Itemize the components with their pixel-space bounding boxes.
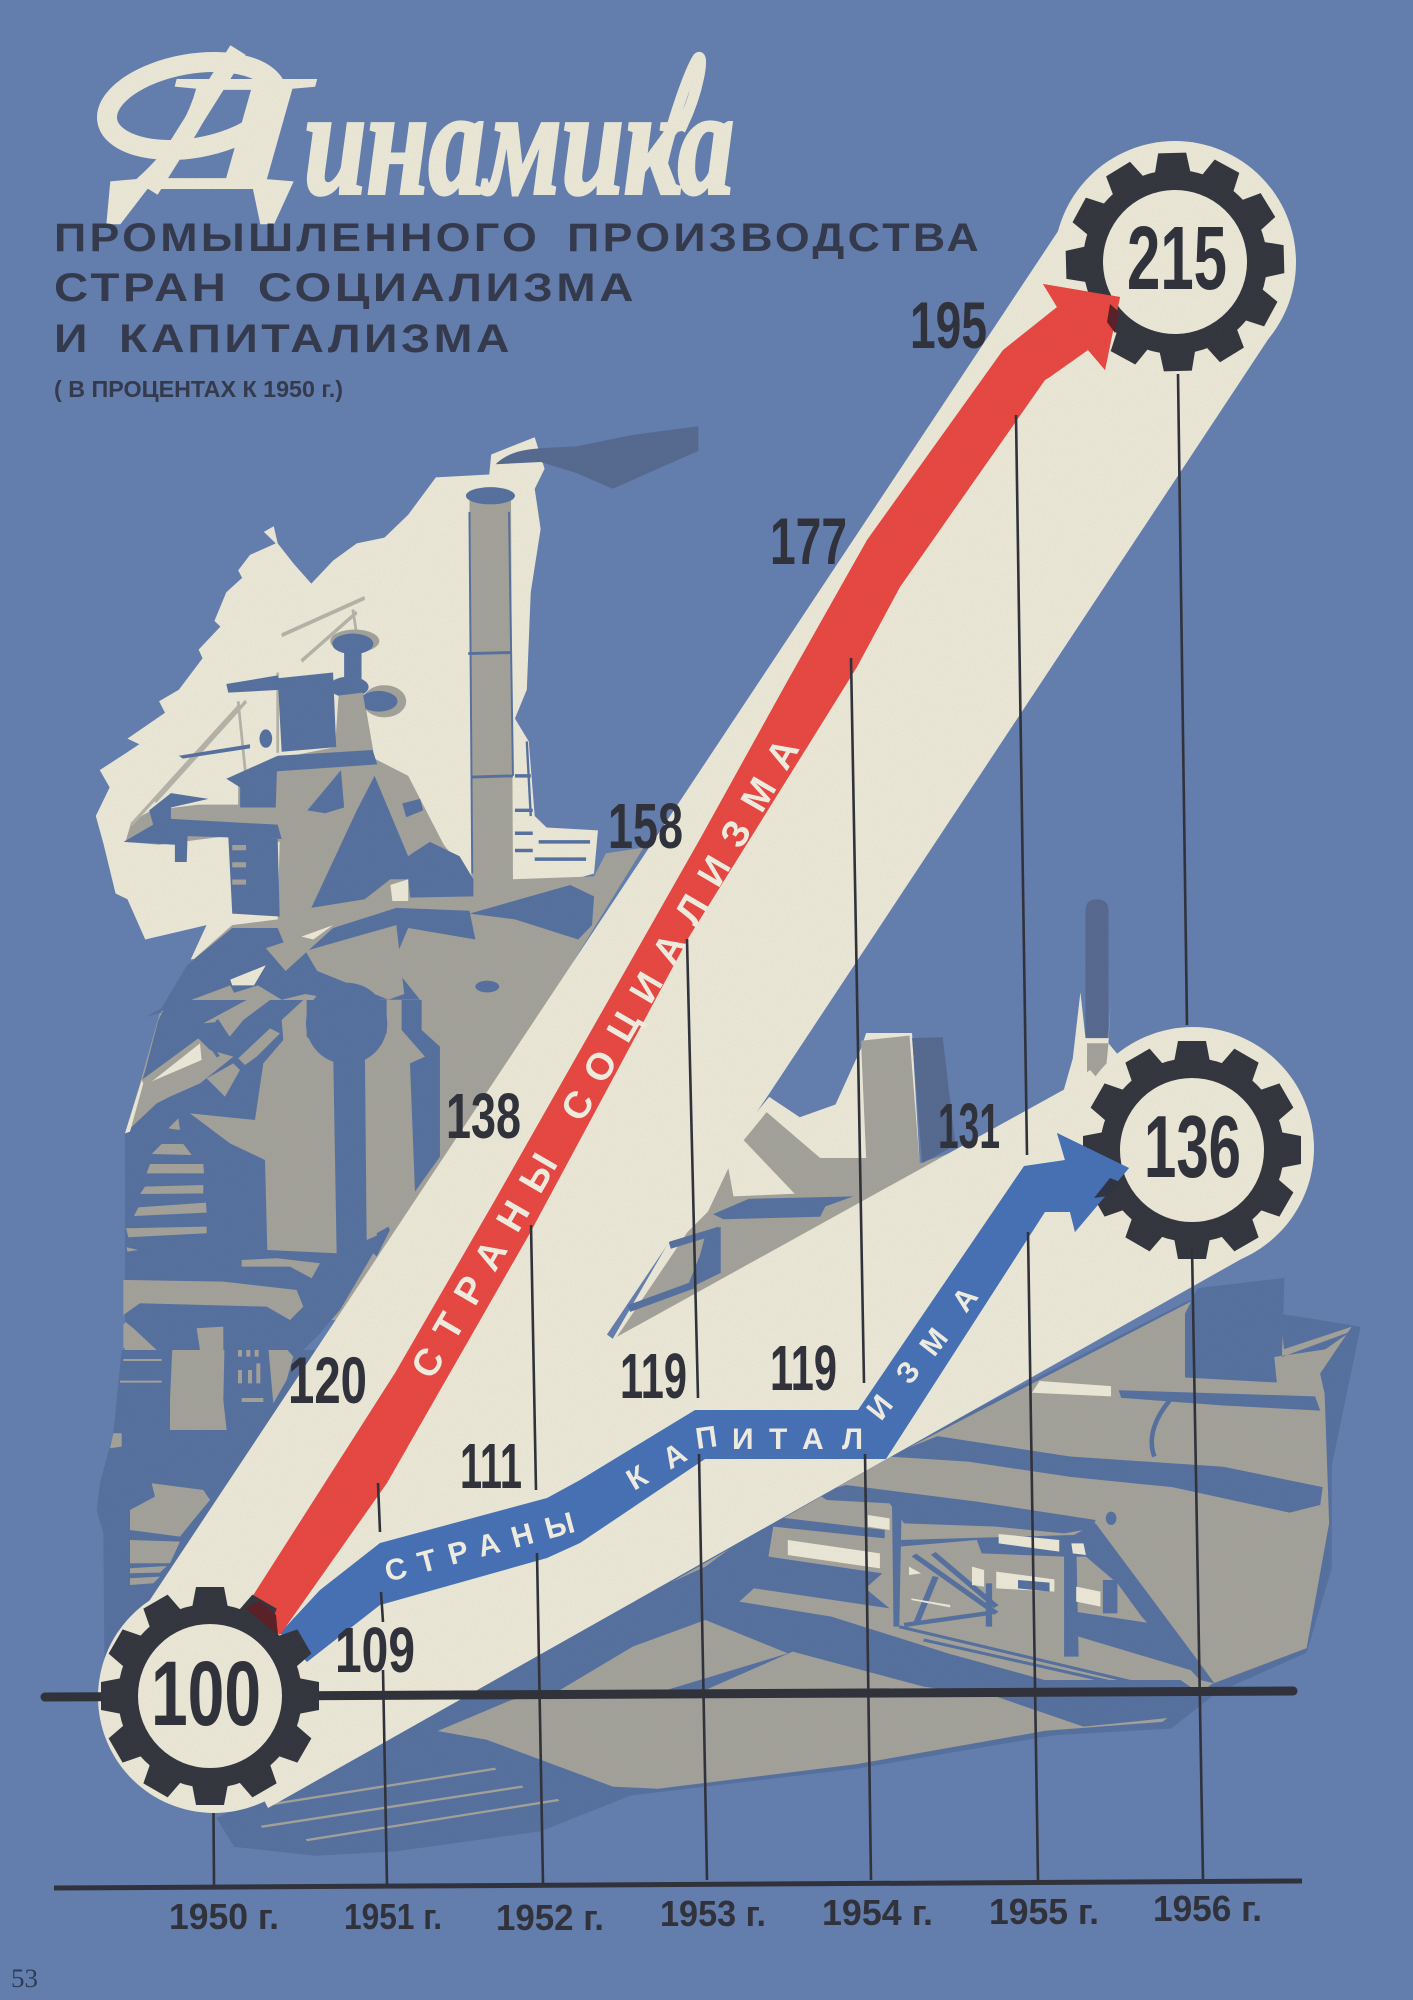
band label: capitalist countries, second word: Т [769, 1423, 787, 1456]
gear 215: 215 [1127, 209, 1227, 309]
illustration: gantry details [405, 1485, 1214, 1737]
lit windows [788, 1515, 1100, 1607]
note: in percent of 1950: ( В ПРОЦЕНТАХ К 1950 г.) [54, 376, 343, 402]
title: script word: инамика [304, 60, 734, 226]
illustration: factory lower left [97, 1323, 320, 1720]
streaks [261, 1769, 559, 1840]
furnace body [125, 495, 643, 1320]
band label: capitalist countries, second word: И [732, 1423, 754, 1456]
illustration: factory top right of lower band [887, 1278, 1351, 1513]
gear 100 [101, 1587, 319, 1805]
top of furnace [330, 630, 379, 652]
year labels: 1954 г. [822, 1892, 933, 1933]
band label: socialist countries: СТРАНЫ СОЦИАЛИЗМА [403, 732, 808, 1386]
data values: capitalist countries [335, 1090, 1000, 1686]
data values: socialist countries [288, 288, 987, 1417]
data values: socialist countries: 120 [288, 1343, 367, 1417]
band label: capitalist countries, second word: А [802, 1423, 824, 1456]
lattice of the charging hoist [131, 598, 365, 825]
shadow right of stem [402, 1000, 440, 1192]
data values: capitalist countries: 131 [938, 1090, 1000, 1162]
illustration: central factory in the wedge [611, 899, 1121, 1342]
data values: capitalist countries: 119 [620, 1340, 687, 1412]
cream chart band: socialist countries [98, 141, 1314, 1813]
band label: capitalist countries, second word: Л [842, 1423, 863, 1456]
gray building [614, 1036, 958, 1342]
gear 215 [1043, 150, 1287, 374]
axis: bottom time axis [54, 1881, 1302, 1888]
year labels: 1956 г. [1153, 1888, 1262, 1929]
data values: capitalist countries: 119 [770, 1332, 837, 1404]
crane arm [123, 793, 282, 862]
data values: capitalist countries: 111 [460, 1430, 522, 1502]
illustration: bridge and gantry lower right [216, 1300, 1361, 1856]
furnace shadow [311, 776, 473, 908]
band label: capitalist countries, second word: З [890, 1355, 927, 1390]
gear 136 [1045, 1041, 1301, 1259]
main diagonal shadow [145, 908, 475, 1017]
cream splash [611, 1033, 920, 1342]
title: script word: Д [107, 41, 316, 224]
band label: capitalist countries, second word: М [914, 1322, 955, 1362]
illustration: smoke from the chimney [496, 426, 698, 489]
data values: socialist countries: 138 [446, 1080, 521, 1152]
furnace base shadow [125, 1000, 390, 1350]
heading: subtitle lines: И КАПИТАЛИЗМА [54, 317, 513, 361]
band label: capitalist countries, second word: И [861, 1389, 900, 1426]
year leader lines [214, 374, 1203, 1885]
cream chart band: capitalist countries [212, 1070, 1252, 1808]
rear chimney [1086, 899, 1108, 1038]
gear 100: 100 [151, 1643, 261, 1745]
data values: socialist countries: 177 [770, 504, 847, 578]
band label: capitalist countries, second word: А [657, 1437, 692, 1476]
heading: subtitle lines: СТРАН СОЦИАЛИЗМА [54, 266, 637, 310]
band label: capitalist countries, second word [621, 1281, 985, 1497]
band label: capitalist countries, second word: П [693, 1420, 719, 1456]
year labels: 1950 г. [169, 1896, 279, 1937]
arrow: blue capitalist countries line [280, 1133, 1129, 1662]
year labels [169, 1888, 1262, 1938]
band label: capitalist countries, second word: А [946, 1281, 985, 1318]
data values: socialist countries: 158 [608, 790, 683, 862]
year labels: 1952 г. [496, 1897, 604, 1938]
data values: socialist countries: 195 [910, 288, 987, 362]
sky splash behind furnace [96, 437, 598, 960]
chimney top and bands [466, 487, 515, 504]
year labels: 1951 г. [344, 1896, 442, 1937]
arrow: red socialist countries line [245, 284, 1120, 1635]
ball of the stem [306, 983, 387, 1064]
gray stripes and pipes [123, 1144, 320, 1350]
shadow of the ground [216, 1300, 1361, 1856]
data values: capitalist countries: 109 [335, 1614, 415, 1686]
year labels: 1955 г. [989, 1891, 1099, 1932]
year labels: 1953 г. [660, 1893, 766, 1934]
axis: thick baseline at 100 percent [45, 1691, 1293, 1697]
heading: subtitle lines [54, 216, 982, 361]
gear 136: 136 [1144, 1097, 1241, 1196]
ground gray [424, 1300, 1352, 1789]
title: script word [100, 41, 734, 226]
page number: 53 [11, 1964, 38, 1993]
illustration: furnace base with pipes and stem [123, 983, 440, 1350]
heading: subtitle lines: ПРОМЫШЛЕННОГО ПРОИЗВОДСТВА [54, 216, 982, 260]
band label: capitalist countries, first word: СТРАНЫ [381, 1506, 578, 1589]
illustration: blast furnace and chimney [96, 437, 643, 1320]
band label: capitalist countries, second word: К [621, 1459, 654, 1497]
lower furnace shadow [97, 1350, 320, 1720]
